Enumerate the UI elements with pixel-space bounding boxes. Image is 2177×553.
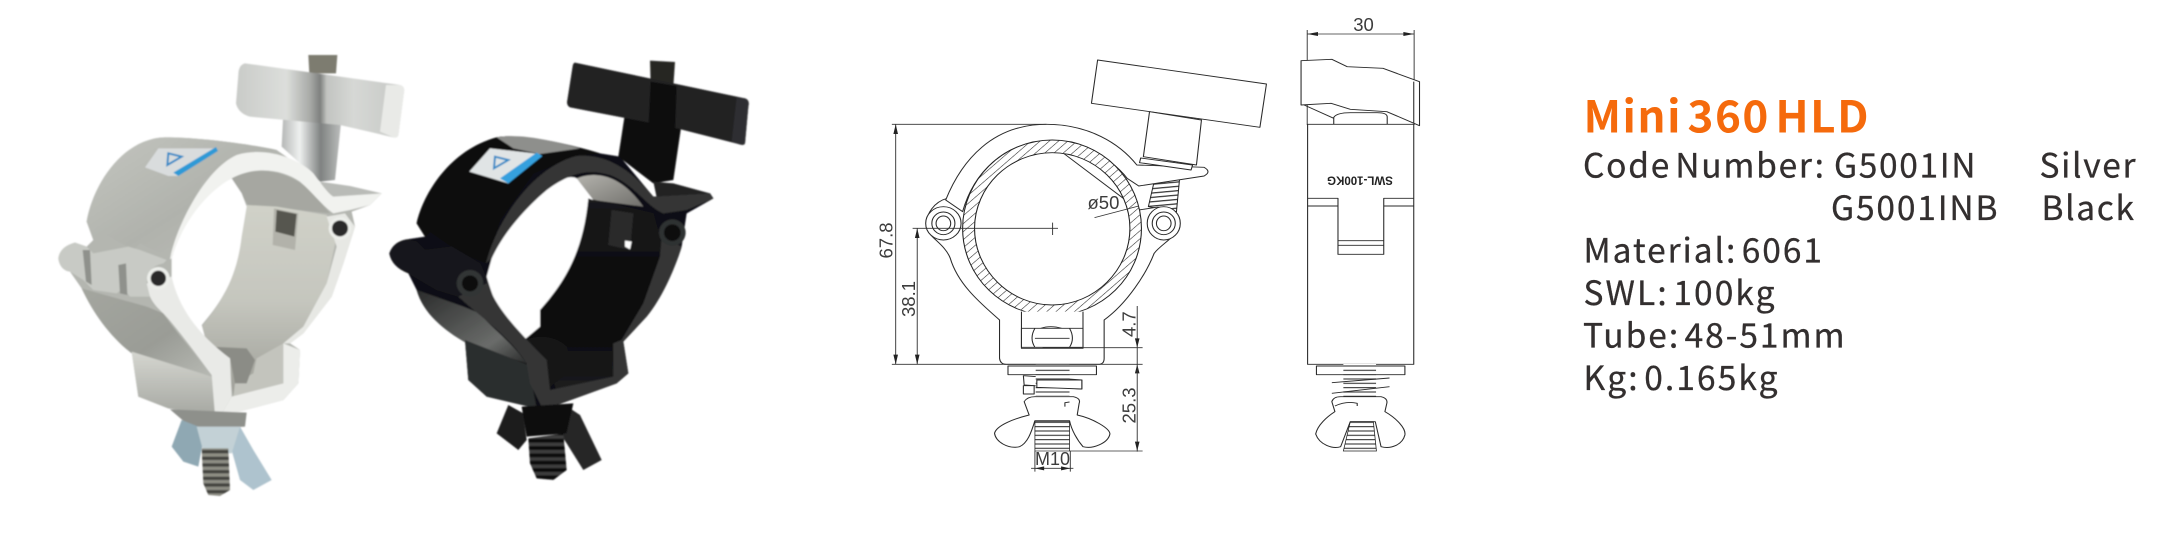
side washer (1316, 366, 1405, 375)
black bottom block (465, 340, 537, 408)
black slot (608, 210, 633, 250)
silver left lower face (82, 288, 210, 375)
bolt slot (1021, 312, 1083, 348)
nut offset label: 4.7 (1118, 311, 1140, 337)
lower jaw outline (926, 143, 1179, 364)
material: Material: 6061 (1584, 224, 1822, 272)
silver label blue strip (173, 147, 218, 176)
code number silver row (1583, 138, 2136, 188)
hex nut (1021, 327, 1083, 347)
silver knob (236, 63, 404, 138)
silver slot roller (275, 210, 297, 237)
silver right screw (329, 217, 351, 240)
code number black row: Black (2042, 181, 2134, 230)
silver top jaw rim (170, 152, 382, 259)
silver clamp opening (172, 178, 247, 343)
black thread (528, 433, 567, 480)
side spring washer (1332, 378, 1390, 393)
threaded stud (1148, 179, 1180, 212)
product specifications (1583, 82, 2136, 400)
black bolt head (520, 337, 570, 387)
width dimension lines (1307, 30, 1414, 125)
nut offset dimension lines (1043, 306, 1143, 373)
black label (469, 148, 540, 183)
black slot hole (625, 241, 632, 249)
technical drawing line work (892, 30, 1420, 472)
silver body silhouette (58, 137, 382, 417)
silver lower-left rim (147, 277, 232, 417)
wing nut (995, 397, 1110, 447)
front view (892, 60, 1266, 472)
black body silhouette (389, 136, 713, 410)
silver top jaw outer face (87, 137, 277, 258)
black right wing (560, 408, 602, 470)
black left lower face (417, 290, 527, 363)
overall height label: 67.8 (876, 222, 896, 258)
tube section hatching (963, 140, 1141, 316)
code number silver row: Silver (2040, 138, 2136, 188)
black hinge (389, 239, 487, 297)
code number silver row: G5001IN (1834, 138, 1976, 188)
side thread lower (1343, 422, 1376, 451)
black top jaw sheen (497, 136, 580, 154)
centre height dimension lines (915, 228, 920, 364)
silver hinge grooves (83, 250, 127, 295)
silver right wing (228, 427, 272, 490)
top jaw and latch outline (946, 124, 1208, 212)
side wing nut seam (1335, 402, 1357, 406)
black knob hub (648, 82, 677, 133)
black right screw (659, 219, 686, 246)
product title: Mini 360 HLD (1584, 82, 1868, 146)
silver label (145, 148, 217, 176)
black clamp opening (487, 177, 593, 343)
thread size label: M10 (1035, 448, 1070, 469)
silver bolt head (210, 347, 255, 383)
black top jaw outer face (417, 136, 600, 263)
left pivot screw (926, 207, 961, 240)
side hub (1334, 113, 1387, 124)
black nut hub (522, 403, 573, 437)
code number black row (1831, 181, 2134, 230)
centre mark (913, 223, 1058, 235)
spring washer (1023, 376, 1082, 389)
bolt thread lower (1035, 422, 1070, 451)
silver right rim (283, 213, 355, 343)
diameter leader (1095, 206, 1139, 218)
black underside of top jaw (573, 175, 643, 207)
bolt length label: 25.3 (1118, 387, 1140, 424)
product photo: silver clamp (58, 55, 404, 496)
side wing nut (1316, 397, 1405, 447)
black label blue strip (500, 153, 542, 183)
black hinge screw (457, 270, 483, 297)
black top rim (486, 156, 713, 263)
tube diameter label: ø50 (1088, 192, 1119, 213)
silver shaft (282, 113, 342, 182)
wing nut seam (1065, 402, 1070, 407)
silver interior floor (233, 343, 283, 397)
weight: Kg: 0.165kg (1584, 351, 1778, 400)
black knob (567, 63, 749, 145)
flat washer (1008, 366, 1096, 375)
silver bottom rim (220, 343, 300, 417)
silver washer (170, 409, 247, 429)
silver slot (273, 208, 298, 250)
silver hinge (58, 243, 167, 297)
bolt length dimension lines (1070, 364, 1143, 452)
side slot (1308, 198, 1414, 254)
black knob end face (732, 97, 749, 145)
black stud (650, 61, 675, 87)
dimension labels (876, 14, 1393, 469)
engraved load marking: SWL-100KG (1327, 174, 1393, 186)
thread dimension lines (1031, 451, 1073, 472)
silver stud (308, 55, 337, 73)
silver thread (202, 448, 230, 496)
silver left wing (172, 420, 203, 467)
spring washer front (1023, 380, 1082, 394)
silver latch plate (320, 182, 382, 213)
silver bottom block (132, 352, 215, 416)
overall height dimension lines (892, 124, 1143, 364)
silver nut hub (197, 427, 240, 453)
code number black row: G5001INB (1831, 181, 1998, 230)
side body (1308, 124, 1414, 364)
bolt thread upper (1036, 364, 1070, 396)
latch washer (1140, 158, 1193, 170)
silver hinge screw (147, 267, 170, 290)
code number silver row: Code Number: (1583, 138, 1824, 188)
knob shaft (1143, 112, 1201, 165)
black lower rim (458, 237, 682, 410)
right pivot screw (1147, 207, 1180, 240)
silver knob end face (380, 85, 404, 138)
knob (1091, 60, 1266, 127)
centre height label: 38.1 (898, 281, 919, 317)
safe working load: SWL: 100kg (1584, 266, 1775, 315)
silver underside of top jaw (232, 171, 330, 213)
product photo: black clamp (389, 61, 749, 480)
width label: 30 (1353, 14, 1374, 35)
side knob (1301, 59, 1420, 126)
side knob detail (1304, 82, 1414, 123)
silver label logo (167, 153, 182, 165)
tube size: Tube: 48-51mm (1583, 308, 1844, 358)
black left wing (497, 405, 527, 450)
black latch plate (653, 182, 713, 213)
black shaft (618, 113, 682, 183)
black label logo (494, 157, 508, 168)
side thread upper (1343, 364, 1376, 397)
black back jaw inner surface (520, 198, 663, 390)
side view (1301, 30, 1420, 451)
silver back jaw inner surface (202, 205, 337, 397)
